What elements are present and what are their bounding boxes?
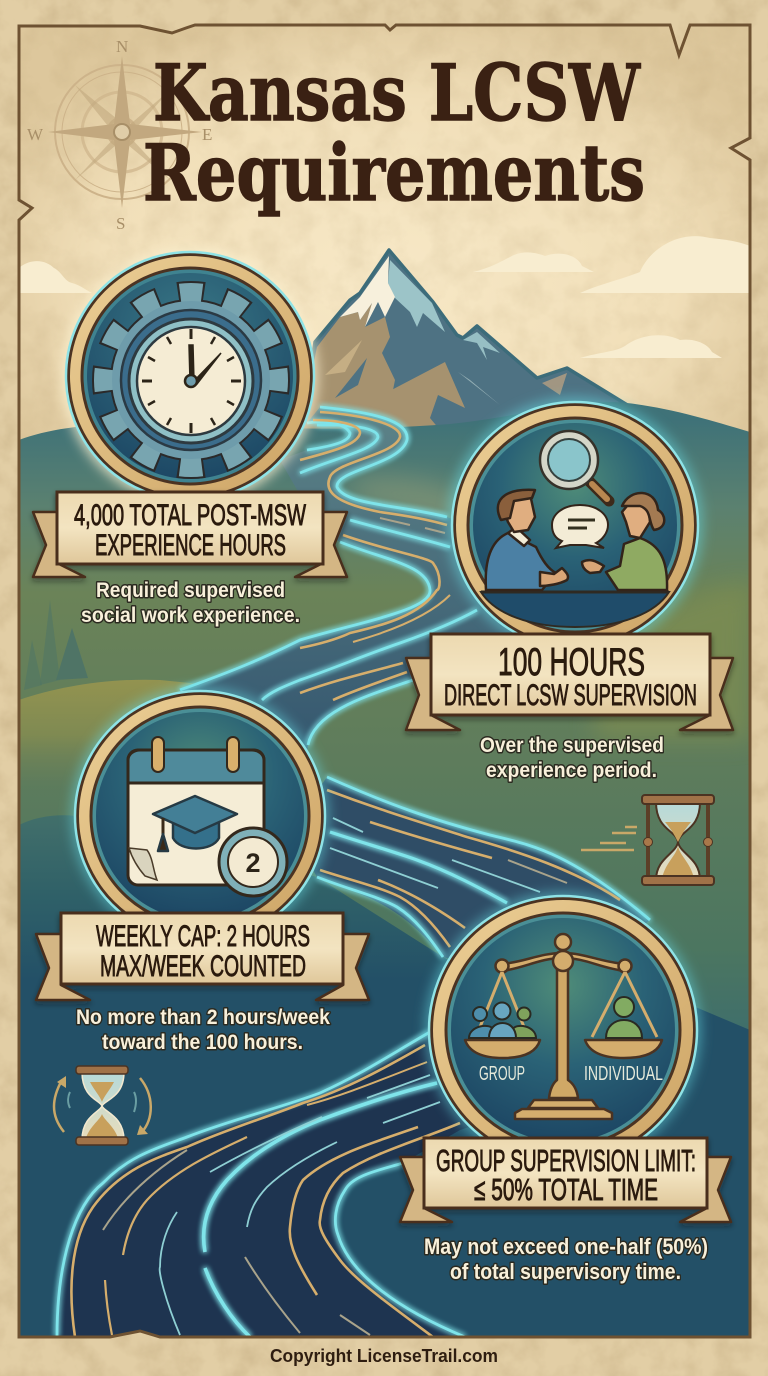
- text: experience description: [81, 579, 300, 627]
- banner: weekly cap: WEEKLY CAP: 2 HOURS: [96, 920, 310, 953]
- title: Requirements: [143, 128, 645, 219]
- text: supervision description: [480, 734, 664, 782]
- compass rose: [27, 37, 212, 233]
- text: experience description: social work experience.: [81, 604, 300, 627]
- text: supervision description: Over the supervised: [480, 734, 664, 757]
- medallion: supervision conversation: [447, 397, 703, 653]
- scale labels: GROUP: [479, 1063, 525, 1085]
- hills: [19, 402, 750, 1337]
- banner: 100 hours: 100 HOURS: [498, 641, 645, 684]
- banner: weekly cap: MAX/WEEK COUNTED: [100, 950, 306, 983]
- compass rose: E: [202, 125, 212, 144]
- text: experience description: Required supervised: [96, 579, 285, 602]
- text: supervision description: experience period.: [486, 759, 657, 782]
- icon: woman: [582, 493, 667, 590]
- banner: 4,000 hours: EXPERIENCE HOURS: [95, 529, 286, 562]
- hourglass with rotation arrows: [54, 1066, 151, 1145]
- compass rose: W: [27, 125, 44, 144]
- text: weekly description: [76, 1006, 330, 1054]
- hourglass with speed lines: [581, 795, 714, 885]
- text: group limit description: May not exceed one-half (50%): [424, 1234, 708, 1259]
- clouds: [20, 236, 750, 358]
- banner: 4,000 hours: 4,000 TOTAL POST-MSW: [74, 499, 306, 532]
- icon: clock badge 2: [219, 828, 287, 896]
- icon: scale: [465, 934, 662, 1119]
- text: weekly description: No more than 2 hours/week: [76, 1006, 330, 1029]
- icon: gear: [104, 292, 278, 468]
- trees: [24, 600, 88, 690]
- banner: group limit: ≤ 50% TOTAL TIME: [474, 1172, 658, 1207]
- icon: graduation cap: [153, 796, 237, 851]
- copyright footer: Copyright LicenseTrail.com: [270, 1346, 498, 1366]
- title: Kansas LCSW: [153, 48, 641, 139]
- compass rose: N: [116, 37, 128, 56]
- icon: magnifying glass: [540, 431, 609, 501]
- text: weekly description: toward the 100 hours.: [102, 1031, 303, 1054]
- banner: 4,000 hours: [33, 492, 347, 577]
- winding road: [57, 407, 650, 1337]
- medallion: balance scale: [425, 892, 701, 1168]
- icon: clock badge 2: 2: [245, 848, 261, 878]
- title: [143, 48, 645, 219]
- text: group limit description: of total supervisory time.: [450, 1259, 681, 1284]
- mountain: [304, 248, 628, 429]
- icon: clock face: [129, 319, 253, 443]
- banner: group limit: [400, 1138, 731, 1222]
- compass rose: S: [116, 214, 125, 233]
- banner: 100 hours: [406, 634, 733, 730]
- medallion: gear clock: [62, 248, 318, 504]
- icon: calendar: [128, 737, 264, 885]
- icon: individual person: [606, 997, 642, 1038]
- icon: speech bubble: [552, 505, 608, 548]
- icon: group people: [469, 1002, 536, 1038]
- text: group limit description: [424, 1234, 708, 1284]
- medallion: weekly calendar: [71, 687, 329, 945]
- scale labels: [479, 1063, 663, 1085]
- icon: man: [486, 490, 568, 590]
- scale labels: INDIVIDUAL: [584, 1063, 663, 1085]
- banner: weekly cap: [36, 913, 369, 1000]
